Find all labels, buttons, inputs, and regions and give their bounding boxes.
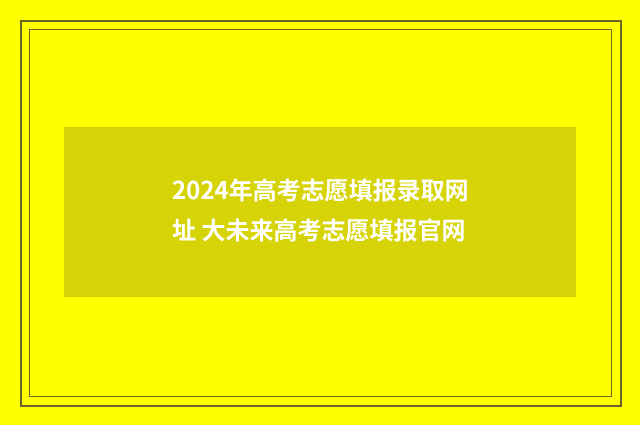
title text: 址 大未来高考志愿填报官网 [172,211,465,246]
inner border frame [29,29,612,397]
panel: title background [64,127,576,297]
title text: 2024年高考志愿填报录取网 [172,171,469,206]
title text [172,171,469,246]
